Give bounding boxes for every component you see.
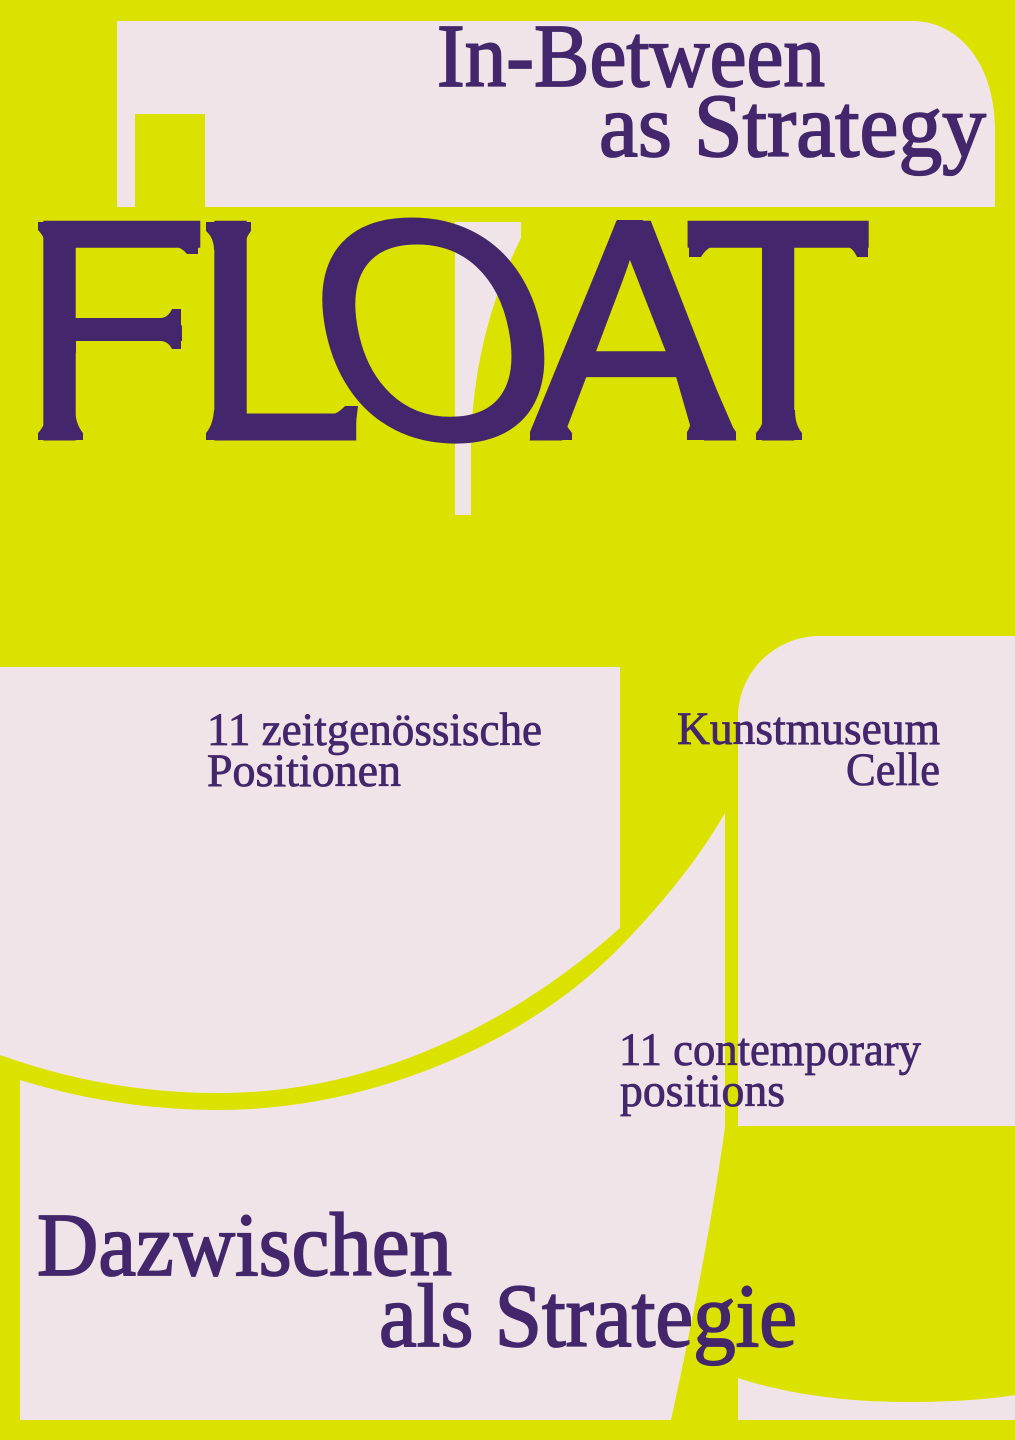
title: FLOAT: T xyxy=(682,154,874,506)
shape: floating sliver xyxy=(455,222,521,515)
panel: right rounded xyxy=(738,636,1015,1126)
text: 11 contemporary positions xyxy=(619,1024,921,1117)
heading: In-Between as Strategy: as Strategy xyxy=(599,77,986,176)
panel: lower large xyxy=(20,813,725,1420)
text: 11 contemporary positions: 11 contemporary xyxy=(619,1024,921,1076)
panel: top banner with rounded corner and notch xyxy=(117,21,995,207)
text: 11 zeitgenössische Positionen: Positionen xyxy=(207,745,401,797)
text: Kunstmuseum Celle: Kunstmuseum xyxy=(677,703,940,755)
title: FLOAT: O xyxy=(278,155,589,507)
panel: bottom right xyxy=(738,1378,1015,1420)
text: 11 contemporary positions: positions xyxy=(620,1065,785,1117)
panel: upper left curved xyxy=(0,667,620,1093)
title: FLOAT: F xyxy=(19,154,211,506)
heading: Dazwischen als Strategie xyxy=(37,1196,797,1366)
heading: In-Between as Strategy: In-Between xyxy=(437,7,825,106)
heading: In-Between as Strategy xyxy=(437,7,986,176)
text: 11 zeitgenössische Positionen: 11 zeitgenössische xyxy=(207,704,542,756)
title: FLOAT: A xyxy=(531,154,736,506)
title: FLOAT: L xyxy=(190,154,365,506)
heading: Dazwischen als Strategie: als Strategie xyxy=(379,1267,797,1366)
text: Kunstmuseum Celle xyxy=(677,703,940,796)
heading: Dazwischen als Strategie: Dazwischen xyxy=(37,1196,452,1295)
text: 11 zeitgenössische Positionen xyxy=(207,704,542,797)
text: Kunstmuseum Celle: Celle xyxy=(846,744,940,796)
title: FLOAT xyxy=(19,154,874,507)
